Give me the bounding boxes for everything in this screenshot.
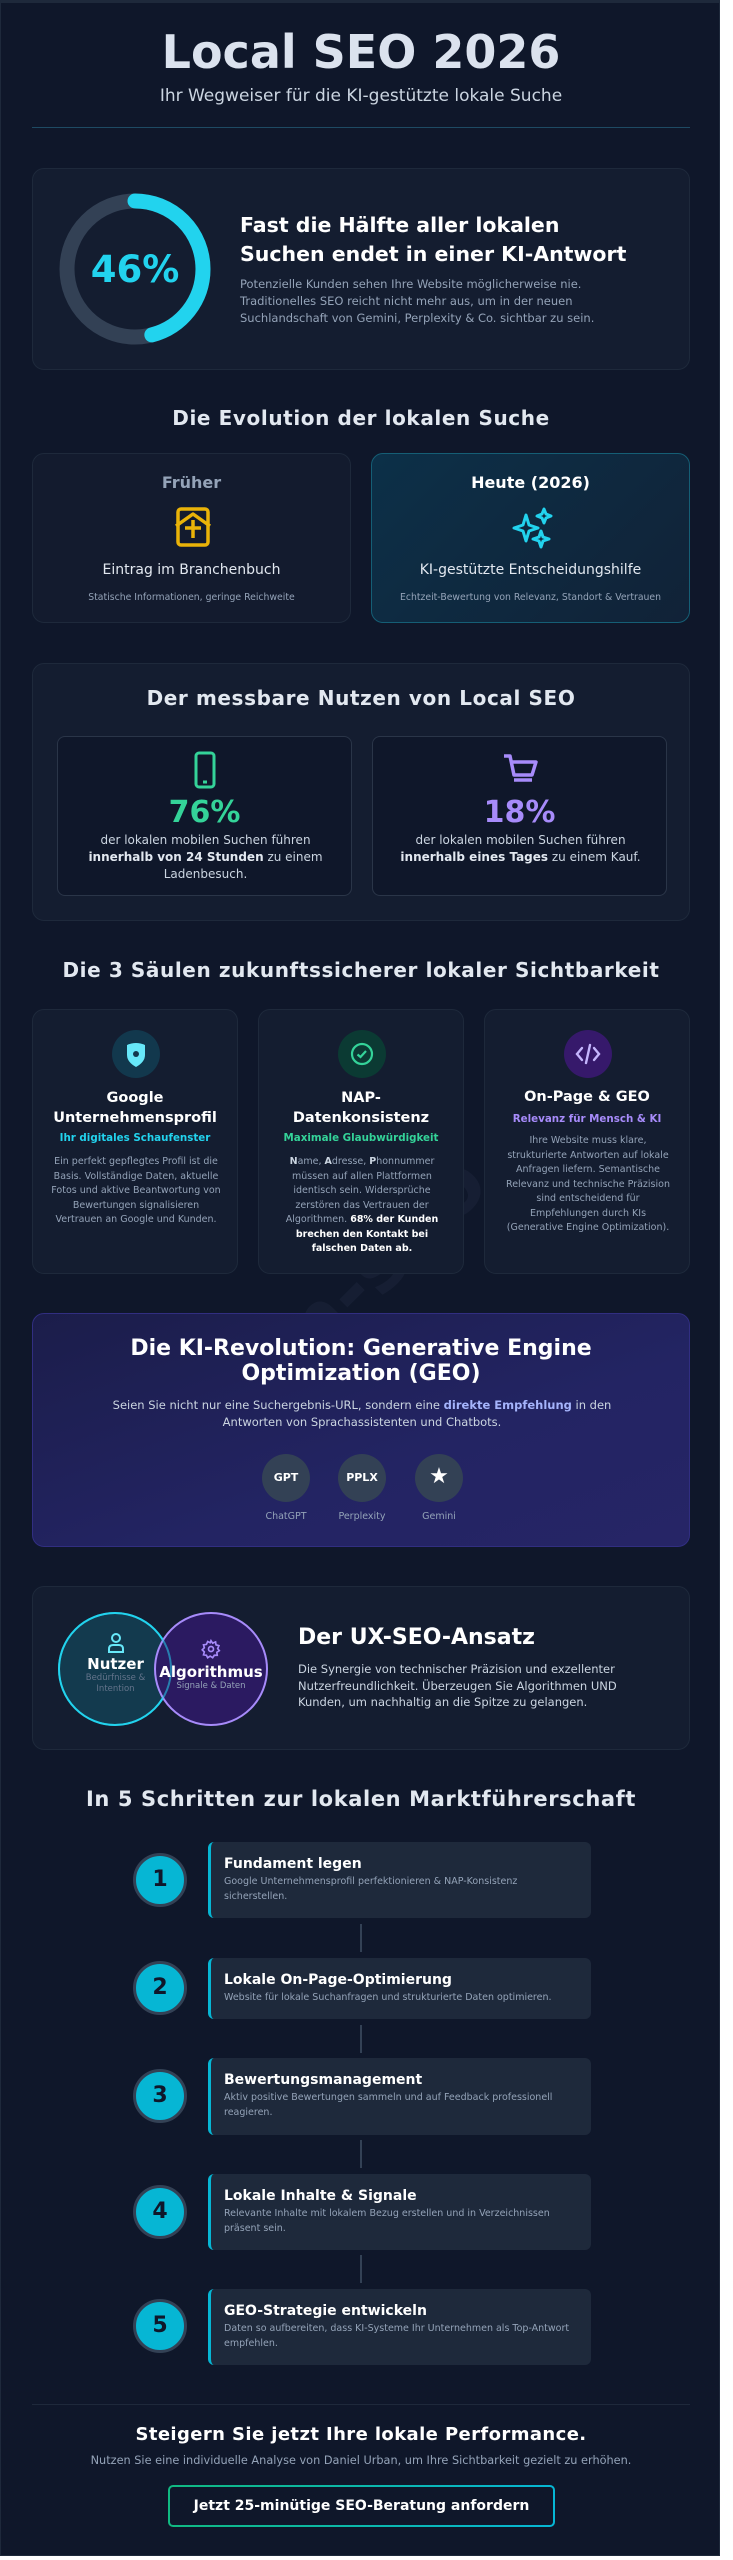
panel: heute: Echtzeit-Bewertung von Relevanz, Standort & Vertrauen [400, 592, 661, 603]
panel: pillar Google: Google [106, 1090, 164, 1106]
heading: 5 Schritte: In 5 Schritten zur lokalen Marktführerschaft [86, 1787, 636, 1811]
step 2 [133, 1958, 591, 2019]
panel: pillar On-Page: Relevanz für Mensch & KI [513, 1113, 661, 1125]
CTA text: Nutzen Sie eine individuelle Analyse von Daniel Urban, um Ihre Sichtbarkeit gezielt zu erhöhen. [91, 2454, 631, 2467]
stat: 18% [372, 736, 667, 896]
watermark: urban-seo.de [117, 1036, 605, 1523]
step 5 [133, 2289, 591, 2365]
step 1: Fundament legen [224, 1856, 362, 1872]
panel: früher: Statische Informationen, geringe Reichweite [88, 592, 295, 603]
heading: Der UX-SEO-Ansatz [298, 1625, 535, 1650]
heading [130, 1336, 592, 1386]
stat: 18%: der lokalen mobilen Suchen führen [415, 833, 626, 847]
panel: pillar Google: Ein perfekt gepflegtes Profil ist die Basis. Vollständige Daten, aktuelle Fotos und aktive Beantwortung von Bewertungen signalisieren Vertrauen an Google und Kunden. [51, 1156, 221, 1225]
headline: Fast die Hälfte aller lokalen [240, 213, 559, 237]
step 1 [133, 1842, 591, 1918]
panel: pillar Google [32, 1009, 238, 1274]
icon: check [338, 1030, 386, 1078]
step 2: Website für lokale Suchanfragen und strukturierte Daten optimieren. [224, 1992, 552, 2003]
step 2: Lokale On-Page-Optimierung [224, 1972, 452, 1988]
panel: pillar NAP: NAP- [341, 1090, 381, 1106]
step 4: 4 [152, 2199, 168, 2224]
icon: ChatGPT: GPT [274, 1471, 298, 1484]
heading: Der messbare Nutzen von Local SEO [147, 686, 575, 710]
panel: pillar NAP: Name, Adresse, Phonnummer müssen auf allen Plattformen identisch sein. Widersprüche zerstören das Vertrauen der Algorithmen. 68% der Kunden brechen den Kontakt bei falschen Daten ab. [286, 1156, 438, 1254]
step 1: Google Unternehmensprofil perfektionieren & NAP-Konsistenz sicherstellen. [224, 1876, 517, 1902]
panel: heute: Heute (2026) [471, 473, 590, 492]
panel: pillar On-Page: On-Page & GEO [524, 1089, 650, 1105]
panel: pillar Google: Unternehmensprofil [53, 1110, 217, 1126]
icon: Perplexity [338, 1454, 386, 1522]
step 3: 3 [152, 2083, 168, 2108]
Nutzer circle label: Nutzer [87, 1655, 144, 1673]
heading: Optimization (GEO) [241, 1361, 480, 1386]
panel: pillar NAP: Maximale Glaubwürdigkeit [284, 1132, 438, 1144]
panel: früher: Eintrag im Branchenbuch [103, 562, 280, 578]
panel: pillar On-Page [484, 1009, 690, 1274]
icon: phone [194, 752, 216, 788]
icon: cart [504, 754, 538, 782]
step 4: Lokale Inhalte & Signale [224, 2188, 417, 2204]
panel: messbarer Nutzen [32, 663, 690, 921]
panel: pillar NAP [258, 1009, 464, 1274]
icon: store [175, 507, 211, 547]
stat: 76%: 76% [169, 795, 240, 830]
venn diagram [58, 1612, 268, 1726]
panel: hero stat [32, 168, 690, 370]
Nutzer circle label: Intention [96, 1684, 135, 1694]
panel: heute: KI-gestützte Entscheidungshilfe [420, 562, 641, 578]
icon: code [564, 1030, 612, 1078]
panel: pillar NAP: Datenkonsistenz [293, 1110, 429, 1126]
panel: pillar Google: Ihr digitales Schaufenster [60, 1132, 210, 1144]
text: Seien Sie nicht nur eine Suchergebnis-URL, sondern eine direkte Empfehlung in den Antworten von Sprachassistenten und Chatbots. [113, 1398, 611, 1429]
subtitle: Ihr Wegweiser für die KI-gestützte lokale Suche [160, 86, 562, 106]
step 5: 5 [152, 2313, 168, 2338]
donut chart 46% [60, 194, 210, 344]
panel: UX-SEO [32, 1586, 690, 1750]
headline: Suchen endet in einer KI-Antwort [240, 242, 626, 266]
stat: 18%: innerhalb eines Tages zu einem Kauf. [400, 850, 641, 864]
step 2: 2 [152, 1975, 168, 2000]
icon: ChatGPT: ChatGPT [265, 1511, 307, 1522]
panel: früher [32, 453, 351, 623]
CTA button [168, 2485, 555, 2527]
Algorithmus circle label: Signale & Daten [176, 1681, 246, 1691]
step 3 [133, 2058, 591, 2135]
icon: shield [112, 1030, 160, 1078]
CTA heading: Steigern Sie jetzt Ihre lokale Performance. [135, 2424, 587, 2445]
step 3: Aktiv positive Bewertungen sammeln und auf Feedback professionell reagieren. [224, 2092, 552, 2118]
icon: ChatGPT [262, 1454, 310, 1522]
text: Die Synergie von technischer Präzision und exzellenter Nutzerfreundlichkeit. Überzeugen Sie Algorithmen UND Kunden, um nachhaltig an die Spitze zu gelangen. [298, 1662, 617, 1709]
title: Local SEO 2026 [162, 25, 560, 79]
icon: Gemini: ★ [429, 1464, 449, 1489]
Algorithmus circle label [159, 1639, 263, 1691]
description: Potenzielle Kunden sehen Ihre Website möglicherweise nie. Traditionelles SEO reicht nicht mehr aus, um in der neuen Suchlandschaft von Gemini, Perplexity & Co. sichtbar zu sein. [240, 277, 594, 325]
icon: Perplexity: PPLX [346, 1471, 378, 1484]
stat: 76%: der lokalen mobilen Suchen führen innerhalb von 24 Stunden zu einem Ladenbesuch. [88, 833, 323, 881]
icon: sparkles [512, 508, 552, 548]
stat: 76% [57, 736, 352, 896]
icon: Gemini [415, 1454, 463, 1522]
step 5: GEO-Strategie entwickeln [224, 2303, 427, 2319]
heading: evolution: Die Evolution der lokalen Suche [172, 406, 550, 430]
icon: Gemini: Gemini [422, 1511, 456, 1522]
Algorithmus circle label: Algorithmus [159, 1663, 263, 1681]
panel: heute [371, 453, 690, 623]
step 1: 1 [152, 1867, 168, 1892]
panel: früher: Früher [162, 473, 221, 492]
step 4: Relevante Inhalte mit lokalem Bezug erstellen und in Verzeichnissen präsent sein. [224, 2208, 550, 2234]
heading: 3 Säulen: Die 3 Säulen zukunftssicherer lokaler Sichtbarkeit [62, 958, 660, 982]
panel: GEO [32, 1313, 690, 1547]
step 3: Bewertungsmanagement [224, 2072, 422, 2088]
panel: pillar On-Page: Ihre Website muss klare, strukturierte Antworten auf lokale Anfragen liefern. Semantische Relevanz und technische Präzision sind entscheidend für Empfehlungen durch KIs (Generative Engine Optimization). [506, 1135, 670, 1233]
icon: Perplexity: Perplexity [338, 1511, 386, 1522]
Nutzer circle label: Bedürfnisse & [86, 1673, 145, 1683]
step 5: Daten so aufbereiten, dass KI-Systeme Ihr Unternehmen als Top-Antwort empfehlen. [224, 2323, 569, 2349]
donut chart 46%: 46% [91, 248, 179, 291]
Nutzer circle label [86, 1633, 145, 1694]
heading: Die KI-Revolution: Generative Engine [130, 1336, 592, 1361]
stat: 18%: 18% [484, 795, 555, 830]
headline [240, 213, 626, 266]
CTA button: Jetzt 25-minütige SEO-Beratung anfordern [194, 2498, 529, 2514]
step 4 [133, 2174, 591, 2250]
